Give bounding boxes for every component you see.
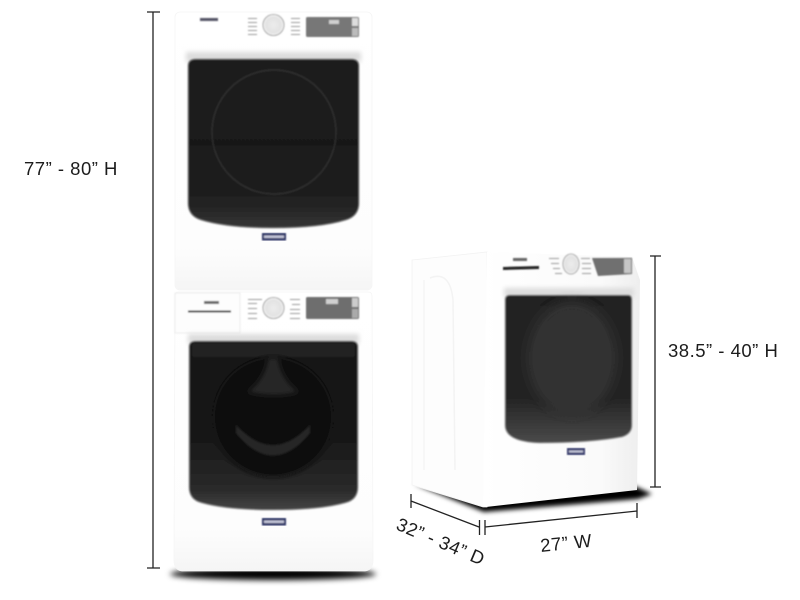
washer body (174, 292, 373, 571)
appliance: stacked dryer (175, 12, 372, 290)
dryer control panel (200, 14, 359, 37)
front panel (483, 252, 640, 507)
label: stacked height: 77” - 80” H (24, 158, 118, 179)
floor shadow (414, 484, 652, 512)
perspective door recess shadow (504, 288, 634, 297)
washer door recess shadow (188, 334, 359, 344)
label: width: 27” W (539, 530, 593, 556)
appliance: stacked washer (170, 292, 376, 580)
dryer logo (262, 233, 286, 240)
label: depth: 32” - 34” D (393, 513, 488, 569)
appliance: washer in perspective (412, 252, 652, 512)
washer logo (262, 518, 286, 526)
washer door (189, 341, 358, 510)
dimension: width line (485, 503, 637, 535)
perspective door (505, 295, 632, 443)
washer drawer (175, 293, 240, 333)
dimension: stacked height line (147, 12, 160, 568)
label: single height: 38.5” - 40” H (668, 340, 778, 361)
dryer door recess shadow (186, 52, 361, 62)
washer shadow (170, 568, 376, 580)
dimension: depth line (411, 494, 480, 535)
dryer body (175, 12, 372, 290)
dryer door (188, 59, 359, 228)
washer control panel (248, 297, 359, 319)
dimension: single height line (650, 256, 661, 487)
perspective logo (567, 448, 585, 455)
side panel (412, 252, 487, 507)
drawer handle and badge (503, 258, 539, 270)
perspective control panel (549, 254, 632, 276)
